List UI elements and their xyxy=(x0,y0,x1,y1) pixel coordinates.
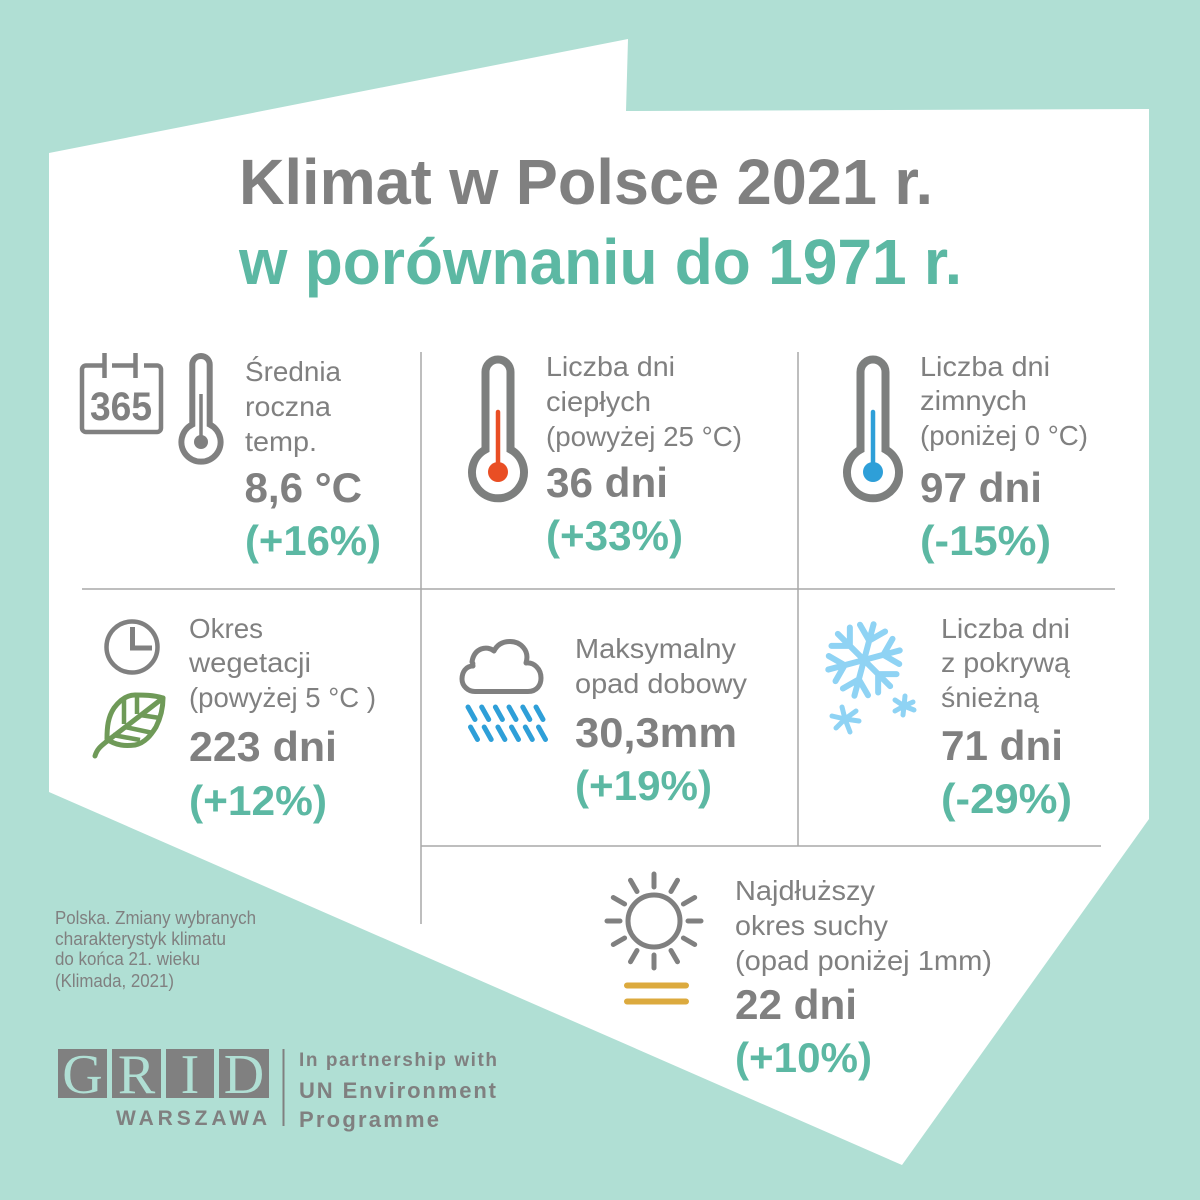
value: 97 dni xyxy=(920,464,1042,511)
label: Okres xyxy=(189,613,263,644)
partnership text: UN Environment xyxy=(299,1078,497,1103)
value: 22 dni xyxy=(735,981,857,1028)
change: (+12%) xyxy=(189,777,327,824)
source note: (Klimada, 2021) xyxy=(55,971,174,991)
value: 223 dni xyxy=(189,723,337,770)
change: (-29%) xyxy=(941,775,1072,822)
label xyxy=(920,351,1088,451)
logo: GRID Warszawa: R xyxy=(118,1044,156,1106)
label: temp. xyxy=(245,426,317,457)
change: (-15%) xyxy=(920,517,1051,564)
icon: snowflakes xyxy=(825,621,914,732)
label: Liczba dni xyxy=(941,613,1070,644)
panel: warm days xyxy=(472,351,742,559)
label: Liczba dni xyxy=(546,351,675,382)
value: 30,3mm xyxy=(575,709,737,756)
panel: vegetation period xyxy=(95,613,376,824)
change: (+19%) xyxy=(575,762,712,809)
icon: red thermometer xyxy=(472,360,524,498)
label: Maksymalny xyxy=(575,633,736,664)
value: 8,6 °C xyxy=(244,464,362,511)
icon: calendar 365: 365 xyxy=(90,385,152,429)
panel: longest dry period xyxy=(607,874,992,1081)
change: (+10%) xyxy=(735,1034,872,1081)
logo: GRID Warszawa: I xyxy=(181,1044,199,1106)
source note xyxy=(55,908,256,991)
panel: average annual temperature xyxy=(82,353,381,564)
label: (powyżej 5 °C ) xyxy=(189,682,376,713)
logo: GRID Warszawa: WARSZAWA xyxy=(116,1107,267,1130)
change: (+16%) xyxy=(245,517,381,564)
icon: rain cloud xyxy=(462,642,546,740)
label xyxy=(575,633,747,699)
label: roczna xyxy=(245,391,331,422)
label: Liczba dni xyxy=(920,351,1050,382)
panel: maximum daily precipitation xyxy=(462,633,747,809)
icon: sun with gold lines xyxy=(607,874,701,1002)
icon: calendar 365 xyxy=(82,353,161,432)
label: z pokrywą xyxy=(941,647,1070,678)
label: Najdłuższy xyxy=(735,875,875,906)
title xyxy=(238,146,962,298)
icon: leaf xyxy=(95,695,163,756)
label: Średnia xyxy=(245,355,341,387)
change: (+33%) xyxy=(546,512,683,559)
logo: GRID Warszawa xyxy=(58,1044,284,1130)
source note: do końca 21. wieku xyxy=(55,949,200,969)
label: wegetacji xyxy=(188,647,311,678)
label: okres suchy xyxy=(735,910,888,941)
label: opad dobowy xyxy=(575,668,747,699)
label: (poniżej 0 °C) xyxy=(920,420,1088,451)
logo: GRID Warszawa: G xyxy=(62,1044,103,1106)
logo: GRID Warszawa: D xyxy=(224,1044,264,1106)
label: ciepłych xyxy=(546,386,651,417)
partnership text: In partnership with xyxy=(299,1050,497,1071)
value: 71 dni xyxy=(941,722,1063,769)
title: w porównaniu do 1971 r. xyxy=(238,226,962,298)
label xyxy=(735,875,992,976)
label: (powyżej 25 °C) xyxy=(546,421,742,452)
label: śnieżną xyxy=(941,682,1039,713)
label: (opad poniżej 1mm) xyxy=(735,945,992,976)
icon: clock xyxy=(106,622,158,672)
label xyxy=(188,613,376,713)
label xyxy=(546,351,742,452)
label xyxy=(941,613,1070,713)
partnership text: Programme xyxy=(299,1107,439,1132)
panel: cold days xyxy=(847,351,1088,564)
label: zimnych xyxy=(920,385,1027,416)
label xyxy=(245,355,341,457)
icon: blue thermometer xyxy=(847,360,899,498)
icon: grey thermometer xyxy=(181,356,221,462)
value: 36 dni xyxy=(546,459,668,506)
source note: Polska. Zmiany wybranych xyxy=(55,908,256,928)
source note: charakterystyk klimatu xyxy=(55,929,226,949)
title: Klimat w Polsce 2021 r. xyxy=(239,146,933,218)
panel: snow cover days xyxy=(825,613,1072,822)
partnership text xyxy=(299,1050,497,1132)
